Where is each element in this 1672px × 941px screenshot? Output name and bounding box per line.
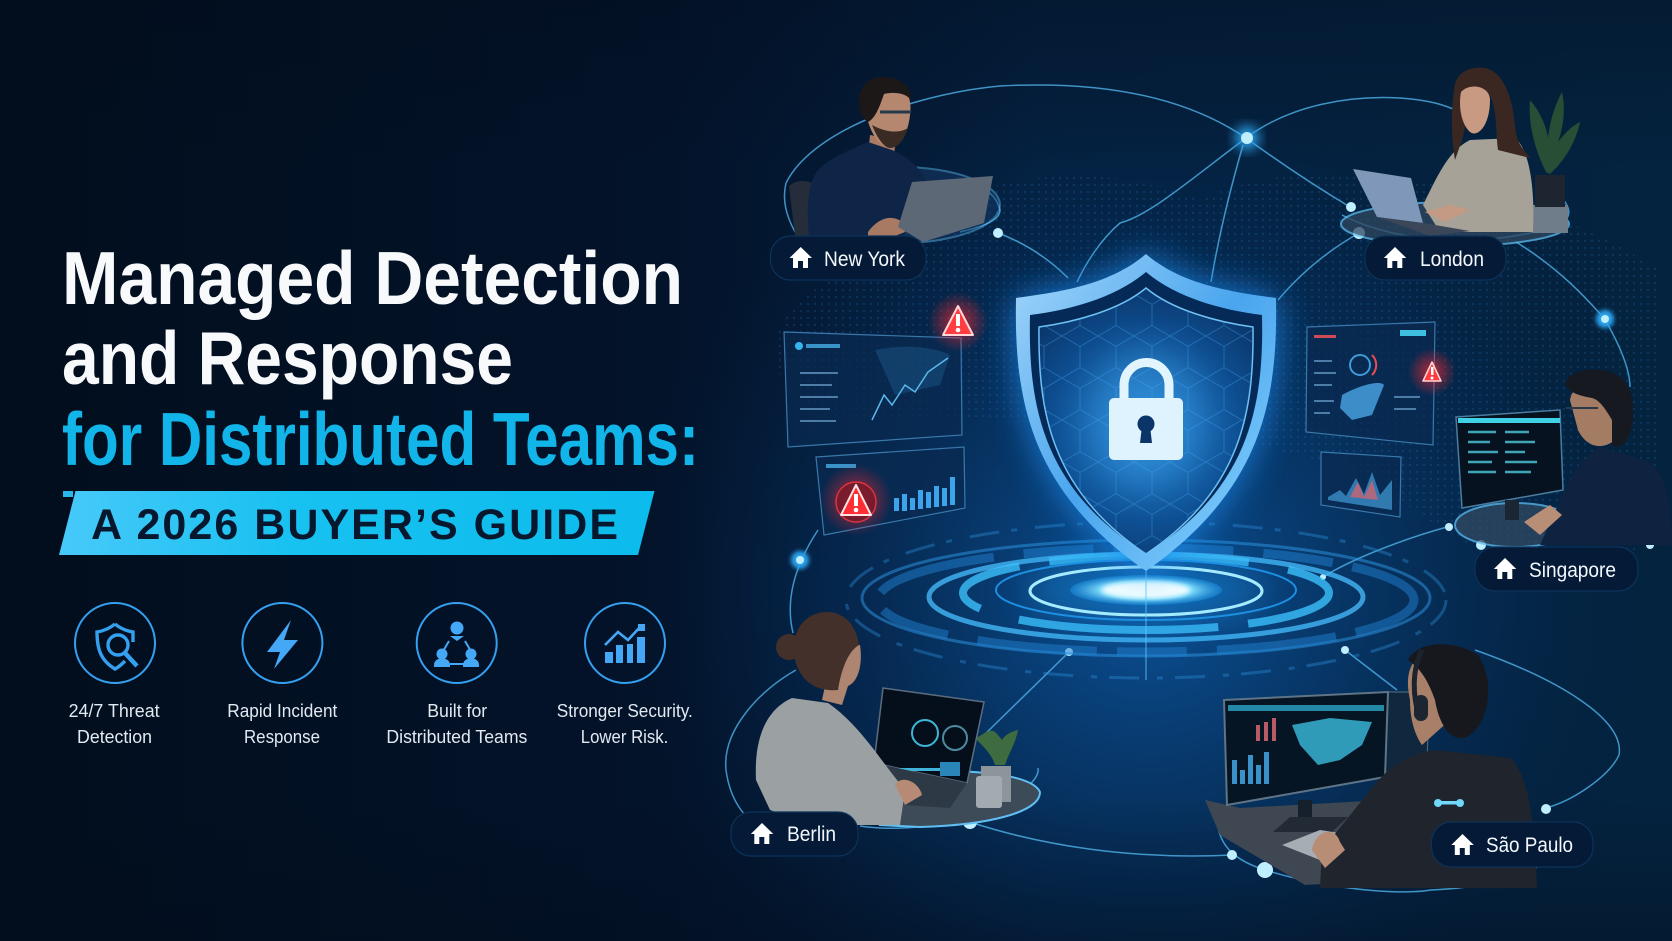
alert icon: top left (928, 292, 988, 352)
person: New York (789, 77, 1000, 243)
feature: distributed teams: Built for (427, 700, 487, 721)
location label: London (1365, 236, 1506, 280)
feature: stronger security: Lower Risk. (581, 726, 668, 747)
feature: incident response (227, 603, 337, 747)
feature: incident response: Response (244, 726, 320, 747)
icon: home (751, 823, 773, 844)
icon: connected people (417, 603, 497, 683)
feature: incident response: Rapid Incident (227, 700, 337, 721)
location label: Singapore: Singapore (1529, 559, 1616, 582)
dashboard panel: threat map (784, 332, 962, 447)
location label: New York (770, 236, 926, 280)
feature: stronger security (557, 603, 693, 747)
icon: home (1494, 558, 1516, 579)
title: for Distributed Teams: (62, 397, 699, 481)
alert icon: right (1408, 348, 1456, 396)
icon: rising bar chart (585, 603, 665, 683)
network nodes (791, 126, 1654, 878)
dashboard panel: alert with bars (816, 447, 965, 536)
icon: home (790, 247, 812, 268)
location label: Berlin: Berlin (787, 823, 836, 846)
title: and Response (62, 316, 513, 400)
icon: shield with magnifier (75, 603, 155, 683)
network connection lines (726, 85, 1654, 892)
icon: potted plant (1530, 92, 1580, 233)
icon: desk plant and cup (975, 730, 1018, 808)
location label: Berlin (731, 812, 858, 856)
title (62, 236, 699, 481)
dashboard panel: analytics right (1306, 322, 1456, 445)
subtitle banner (59, 491, 654, 555)
person: Sao Paulo (1205, 644, 1537, 888)
icon: home (1451, 834, 1474, 855)
location label: Sao Paulo: São Paulo (1486, 834, 1573, 857)
person: London (1341, 68, 1580, 246)
location label: London: London (1420, 248, 1484, 271)
location label: Singapore (1475, 547, 1638, 591)
icon: lightning bolt (242, 603, 322, 683)
background (568, 0, 1672, 941)
location label: New York: New York (824, 248, 905, 271)
feature: threat detection: 24/7 Threat (69, 700, 160, 721)
location label: Sao Paulo (1432, 822, 1593, 867)
title: Managed Detection (62, 236, 683, 320)
subtitle banner: A 2026 BUYER’S GUIDE (91, 501, 618, 549)
holographic platform (846, 522, 1446, 680)
person: Berlin (756, 612, 1040, 827)
feature: distributed teams (386, 603, 527, 747)
icon: home (1384, 247, 1406, 268)
central shield (1016, 254, 1276, 571)
dashboard panel: small chart right (1321, 452, 1401, 517)
feature: stronger security: Stronger Security. (557, 700, 693, 721)
icon: padlock (1086, 350, 1206, 490)
feature: threat detection: Detection (77, 726, 152, 747)
alert icon: lower left (820, 464, 892, 536)
icon: cyan connector (1434, 799, 1464, 807)
feature: distributed teams: Distributed Teams (386, 726, 527, 747)
feature: threat detection (69, 603, 160, 747)
person: Singapore (1455, 370, 1672, 547)
